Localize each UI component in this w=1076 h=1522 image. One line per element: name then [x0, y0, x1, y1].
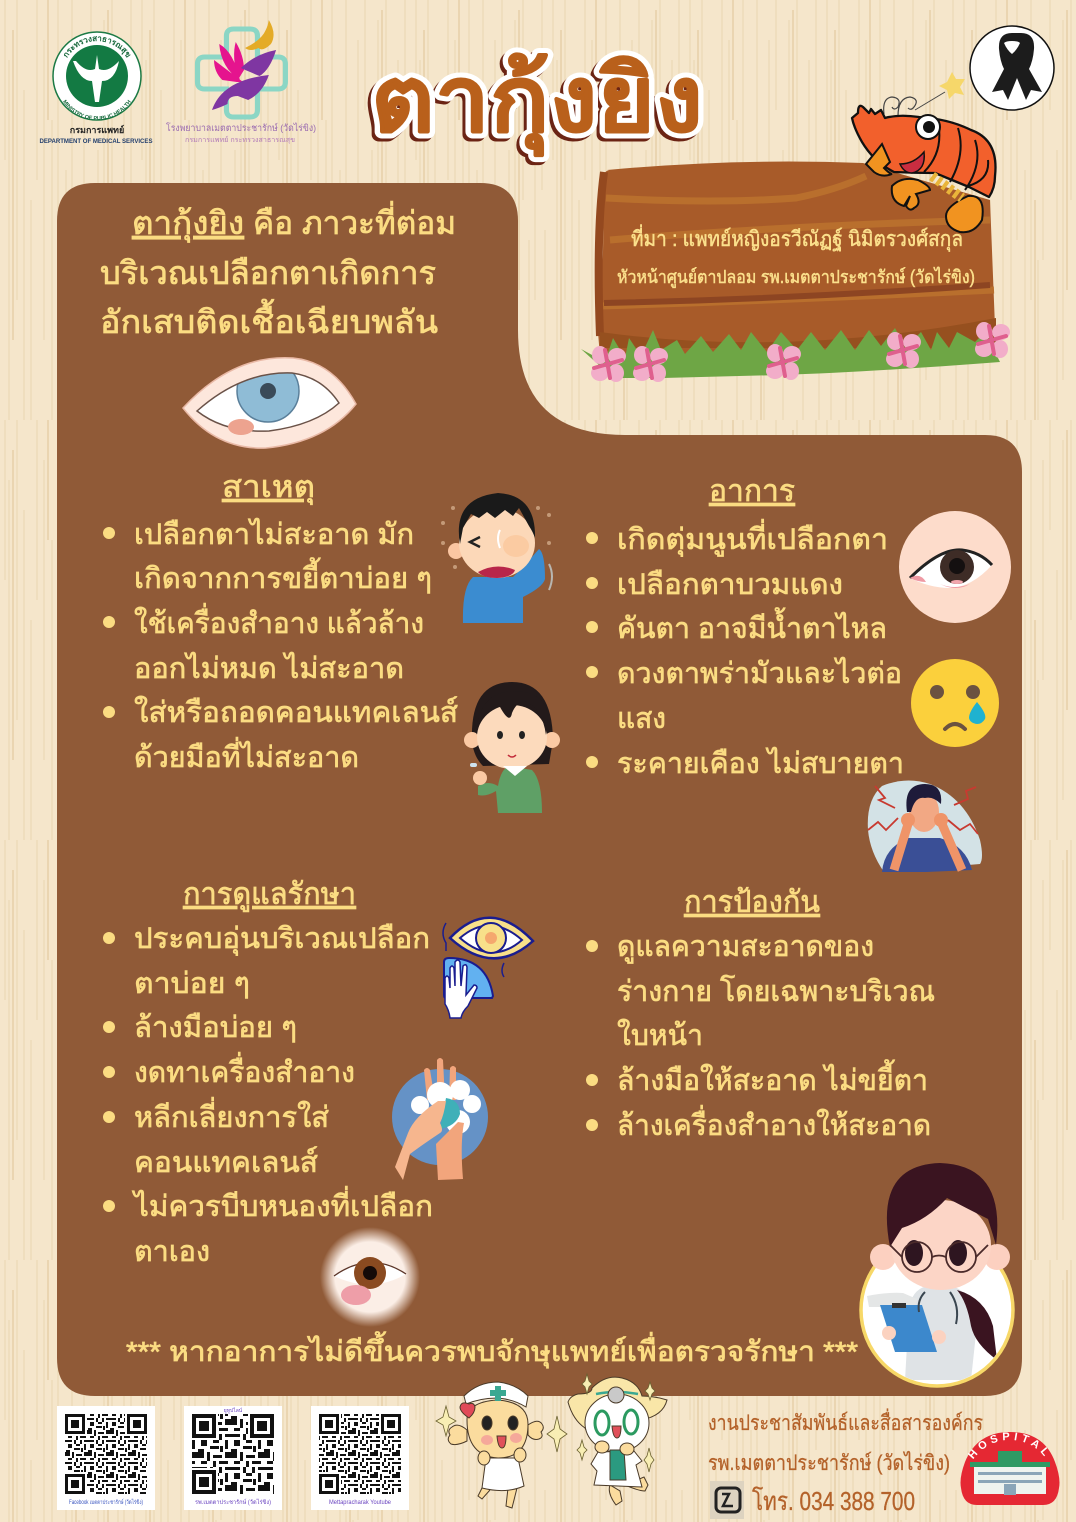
symptoms list: คันตา อาจมีน้ำตาไหล: [617, 607, 887, 645]
definition text: บริเวณเปลือกตาเกิดการ: [100, 255, 436, 291]
treatment list: คอนแทคเลนส์: [134, 1146, 318, 1179]
icon: crying emoji: [911, 659, 999, 747]
section: prevention: [586, 886, 935, 1142]
definition text: อักเสบติดเชื้อเฉียบพลัน: [100, 299, 438, 340]
QR code: youtube: [311, 1406, 409, 1510]
causes bullets: [103, 527, 115, 718]
icon: phone: [710, 1481, 744, 1519]
treatment list: หลีกเลี่ยงการใส่: [134, 1097, 329, 1134]
logo: department of medical services: MINISTRY OF PUBLIC HEALTH: [63, 100, 131, 120]
logo: hospital lotus cross: โรงพยาบาลเมตตาประชารักษ์ (วัดไร่ขิง): [166, 122, 316, 134]
source credit line 1: ที่มา : แพทย์หญิงอรวีณัฏฐ์ นิมิตรวงศ์สกุล: [631, 224, 963, 252]
causes list: [134, 517, 458, 774]
photo: stye on eye: [320, 1227, 420, 1327]
treatment list: ล้างมือบ่อย ๆ: [134, 1012, 297, 1044]
flowers: [591, 322, 1010, 382]
causes list: ออกไม่หมด ไม่สะอาด: [134, 651, 404, 685]
icon: swollen eye circle: [899, 511, 1011, 623]
symptoms list: ระคายเคือง ไม่สบายตา: [617, 746, 904, 780]
title: ตากุ้งยิง: [371, 49, 703, 156]
symptoms list: ดวงตาพร่ามัวและไวต่อ: [617, 656, 902, 690]
main brown panel: [57, 183, 1022, 1396]
PR department contact: [708, 1408, 983, 1519]
icon: warm compress on eye: [443, 918, 533, 1018]
illustration: boy rubbing eye: [441, 493, 552, 623]
QR code: line: [184, 1406, 282, 1510]
grass: [581, 328, 1000, 378]
wooden sign: [581, 162, 1010, 382]
prevention list: ใบหน้า: [617, 1018, 703, 1052]
logo: hospital lotus cross: [166, 20, 316, 144]
treatment bullets: [103, 932, 115, 1212]
sparkles around mascots: [436, 1374, 655, 1472]
logo: hospital lotus cross: กรมการแพทย์ กระทรวงสาธารณสุข: [185, 136, 295, 144]
heading: prevention: การป้องกัน: [684, 886, 820, 919]
treatment list: ตาบ่อย ๆ: [134, 968, 250, 1000]
heading: treatment: การดูแลรักษา: [183, 878, 356, 912]
logo: department of medical services: กรมการแพทย์: [70, 124, 124, 135]
treatment list: งดทาเครื่องสำอาง: [134, 1052, 355, 1089]
symptoms list: แสง: [617, 703, 666, 735]
icon: washing hands: [392, 1058, 488, 1180]
logo: hospital badge: HOSPITAL: [968, 1432, 1048, 1459]
logo: department of medical services: [40, 31, 152, 145]
section: treatment: [103, 878, 433, 1268]
treatment list: ไม่ควรบีบหนองที่เปลือก: [132, 1186, 433, 1223]
prevention list: ล้างมือให้สะอาด ไม่ขยี้ตา: [617, 1059, 928, 1097]
prevention list: [617, 931, 935, 1142]
PR department contact: งานประชาสัมพันธ์และสื่อสารองค์กร: [708, 1408, 983, 1435]
definition text: คือ ภาวะที่ต่อม: [253, 201, 456, 241]
causes list: เปลือกตาไม่สะอาด มัก: [134, 517, 414, 551]
phone number: โทร. 034 388 700: [752, 1486, 915, 1516]
prevention bullets: [586, 940, 598, 1131]
symptoms list: เกิดตุ่มนูนที่เปลือกตา: [617, 519, 888, 557]
shrimp mascot: [852, 72, 996, 232]
definition text: [100, 201, 456, 340]
prevention list: ล้างเครื่องสำอางให้สะอาด: [617, 1105, 931, 1142]
source credit line 2: หัวหน้าศูนย์ตาปลอม รพ.เมตตาประชารักษ์ (วัดไร่ขิง): [617, 266, 975, 288]
icon: eye with stye: [183, 358, 356, 448]
mascot: doctor: [568, 1377, 667, 1505]
treatment list: ตาเอง: [134, 1236, 210, 1268]
illustration: doctor in yellow circle: [861, 1163, 1013, 1386]
symptoms list: เปลือกตาบวมแดง: [617, 569, 843, 601]
prevention list: ดูแลความสะอาดของ: [617, 931, 874, 964]
QR code: youtube: Mettapracharak Youtube: [329, 1500, 392, 1506]
logo: department of medical services: กระทรวงสาธารณสุข: [64, 36, 130, 58]
causes list: ใส่หรือถอดคอนแทคเลนส์: [134, 695, 458, 729]
illustration: man with eye pain: [868, 780, 982, 872]
section: symptoms: [586, 475, 904, 780]
causes list: ด้วยมือที่ไม่สะอาด: [134, 737, 359, 774]
causes list: เกิดจากการขยี้ตาบ่อย ๆ: [134, 557, 432, 595]
logo: hospital badge: [960, 1432, 1060, 1505]
causes list: ใช้เครื่องสำอาง แล้วล้าง: [134, 603, 424, 640]
prevention list: ร่างกาย โดยเฉพาะบริเวณ: [617, 974, 935, 1008]
QR code: facebook: Facebook เมตตาประชารักษ์ (วัดไร่ขิง): [69, 1498, 143, 1506]
closing advice line: *** หากอาการไม่ดีขึ้นควรพบจักษุแพทย์เพื่อตรวจรักษา ***: [126, 1331, 858, 1369]
logo: department of medical services: DEPARTMENT OF MEDICAL SERVICES: [40, 138, 152, 145]
treatment list: ประคบอุ่นบริเวณเปลือก: [134, 923, 430, 956]
illustration: girl with contact lens: [464, 682, 560, 813]
mascot: nurse: [448, 1382, 543, 1508]
symptoms list: [617, 519, 904, 780]
symptoms bullets: [586, 532, 598, 768]
section: causes: [103, 471, 458, 774]
QR code: line: ยูทูปไลน์: [224, 1407, 243, 1414]
icon: black mourning ribbon: [970, 26, 1054, 110]
definition text: ตากุ้งยิง: [132, 205, 244, 243]
PR department contact: รพ.เมตตาประชารักษ์ (วัดไร่ขิง): [708, 1451, 950, 1475]
title: ตากุ้งยิง: [368, 52, 700, 159]
heading: causes: สาเหตุ: [222, 471, 315, 506]
title: ตากุ้งยิง: [371, 49, 703, 156]
QR code: facebook: [57, 1406, 155, 1510]
treatment list: [132, 923, 433, 1268]
heading: symptoms: อาการ: [709, 475, 795, 508]
QR code: line: รพ.เมตตาประชารักษ์ (วัดไร่ขิง): [195, 1498, 271, 1506]
